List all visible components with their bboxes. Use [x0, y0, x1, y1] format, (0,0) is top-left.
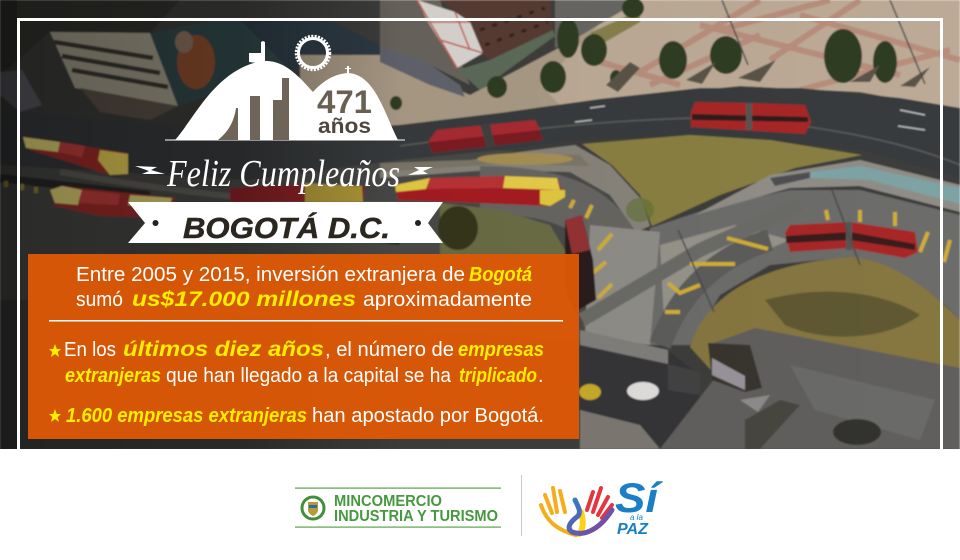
lower roads, left — [0, 150, 650, 340]
wall with graffiti — [380, 48, 465, 97]
bus: behind script — [230, 183, 365, 202]
graffiti wall — [380, 145, 650, 232]
yellow hand — [541, 488, 583, 535]
sun — [296, 36, 330, 70]
bus: centre yellow — [395, 176, 565, 206]
bullet 1: , el número de — [325, 339, 454, 361]
upper grey road — [555, 0, 640, 48]
bullet 1: extranjeras — [65, 365, 161, 387]
left flash — [135, 166, 165, 174]
años: años — [318, 115, 371, 138]
logo: Mincomercio: INDUSTRIA Y TURISMO — [334, 508, 498, 525]
monument logo: 471 años — [165, 36, 405, 140]
road arrows — [575, 106, 925, 130]
white building — [417, 0, 483, 68]
headline text: Entre 2005 y 2015, inversión extranjera de — [76, 264, 465, 286]
heading: Feliz Cumpleaños: Feliz Cumpleaños — [166, 153, 400, 195]
church — [249, 41, 265, 64]
cross — [345, 66, 351, 74]
tan ground — [300, 0, 960, 135]
panel: investment facts — [28, 254, 579, 439]
Sí: Sí — [615, 474, 664, 521]
bullet 1: En los — [64, 339, 116, 361]
left building — [50, 32, 178, 106]
divider — [521, 475, 522, 536]
yellow road stripes — [570, 200, 950, 312]
mural — [150, 20, 320, 106]
bus: ring right — [785, 222, 918, 258]
parking — [380, 0, 470, 85]
bus: yellow red upper left — [23, 137, 128, 175]
poles — [678, 0, 925, 312]
buildings — [218, 78, 289, 140]
ring wall — [695, 160, 960, 215]
bullet 1: triplicado — [459, 365, 537, 387]
logo: Sí a la Paz — [541, 474, 664, 538]
bullet 1: . — [538, 365, 544, 387]
471: 471 — [317, 84, 372, 120]
bullet 1: que han llegado a la capital se ha — [166, 365, 452, 387]
headline text: aproximadamente — [363, 289, 532, 311]
grass 1 — [582, 135, 862, 226]
bullet 2: 1.600 empresas extranjeras — [66, 405, 307, 427]
bullet 1 — [49, 338, 544, 387]
bus: ramp — [565, 215, 596, 312]
red hand — [587, 488, 612, 518]
headline text: us$17.000 millones — [132, 288, 356, 311]
crest — [302, 497, 324, 519]
bullet 2 — [49, 405, 544, 427]
headline text: sumó — [76, 289, 123, 311]
banner dots — [152, 220, 158, 226]
base line — [165, 140, 405, 141]
grass by banner — [440, 203, 568, 255]
banner title: BOGOTÁ D.C. — [183, 212, 390, 245]
bullet 1: empresas — [458, 339, 544, 361]
white frame — [18, 20, 942, 460]
hills — [175, 61, 398, 140]
bus: upper right — [691, 102, 811, 134]
intersection — [585, 225, 660, 345]
grass 2 — [690, 257, 960, 380]
ring road — [480, 190, 620, 335]
bullet 2: han apostado por Bogotá. — [312, 405, 544, 427]
logo: Mincomercio: MINCOMERCIO — [334, 493, 442, 510]
right flash — [408, 167, 433, 175]
top left dark ground — [0, 0, 180, 75]
Paz: PAZ — [617, 521, 649, 538]
yellow marks left — [6, 181, 36, 193]
logo: Mincomercio — [295, 488, 501, 528]
bullet 1: últimos diez años — [123, 338, 324, 361]
headline text: Bogotá — [469, 264, 532, 286]
road median — [400, 118, 960, 165]
banner: Bogotá D.C. — [128, 202, 443, 245]
trees on plaza — [390, 0, 897, 110]
bus: yellow red lower left — [50, 186, 175, 218]
cars — [579, 384, 601, 400]
left posters — [0, 70, 42, 112]
dove — [569, 500, 612, 533]
footer band — [0, 449, 960, 560]
upper road — [0, 88, 960, 180]
ring road right — [630, 190, 960, 345]
bus: centre red — [428, 120, 543, 153]
headline text — [76, 264, 532, 311]
plaza right lighter — [540, 0, 960, 110]
brick building — [440, 0, 553, 60]
a la: a la — [630, 513, 643, 522]
roof — [660, 328, 960, 449]
elevated road — [580, 332, 700, 449]
